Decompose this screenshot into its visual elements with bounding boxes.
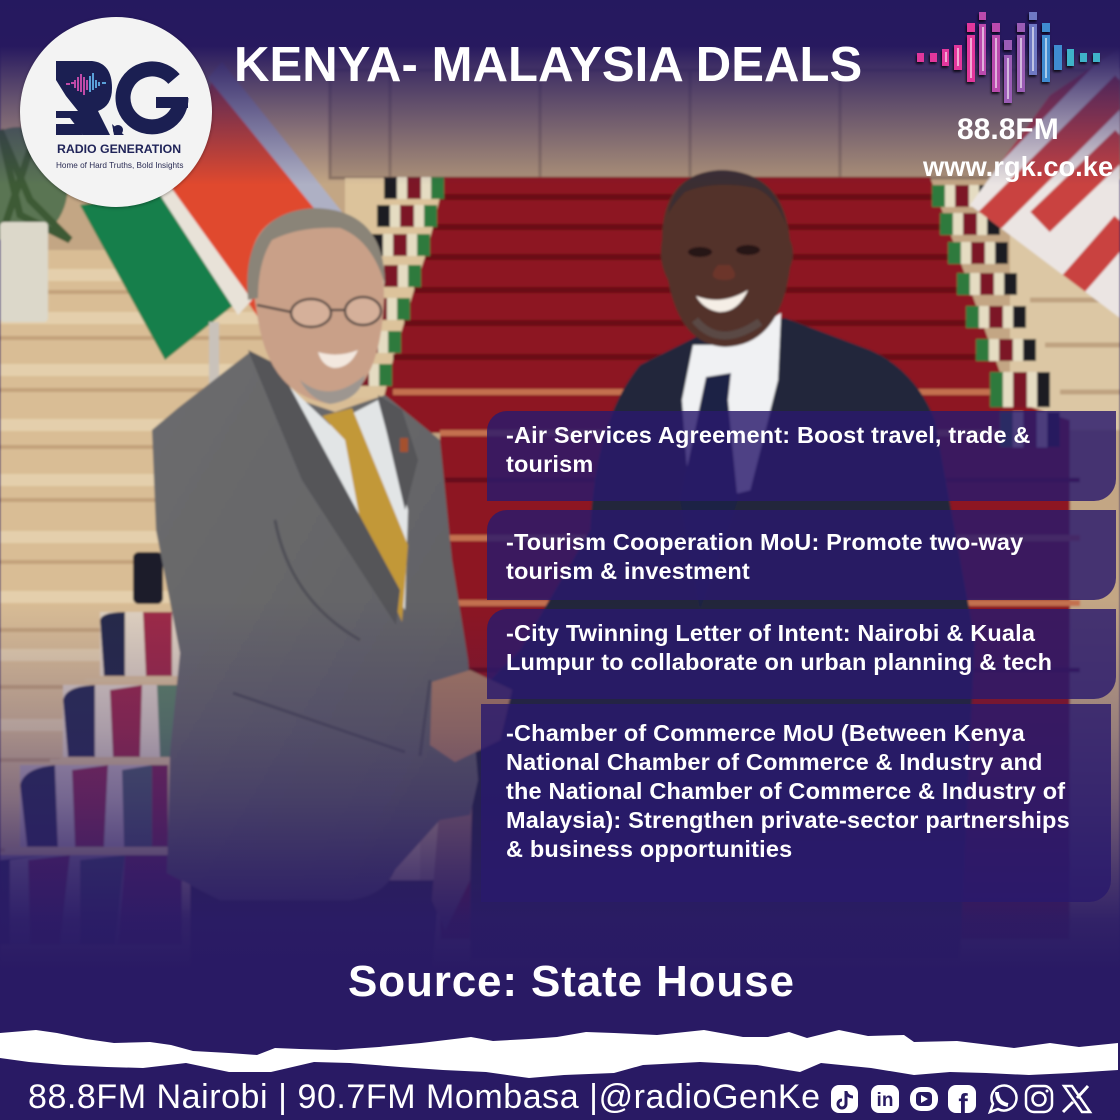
Kenyan flag	[80, 62, 342, 360]
carpet right mosaic border	[932, 185, 1060, 447]
plant and pot	[0, 127, 70, 322]
logo mark	[56, 61, 188, 135]
trousers	[190, 880, 440, 1000]
carpet left mosaic border	[332, 177, 444, 386]
second hand	[432, 800, 472, 930]
mouth	[318, 350, 358, 368]
callout text: -City Twinning Letter of Intent: Nairobi & Kuala	[506, 620, 1035, 646]
callout: tourism	[487, 510, 1116, 600]
callout text: -Chamber of Commerce MoU (Between Kenya	[506, 720, 1025, 746]
left man	[152, 208, 512, 1000]
title: KENYA- MALAYSIA DEALS	[234, 38, 862, 92]
callout text	[506, 422, 1031, 477]
source line: Source: State House	[348, 957, 795, 1006]
icon: tiktok	[831, 1085, 858, 1113]
left stone stairs	[0, 178, 445, 910]
callout text	[506, 529, 1023, 584]
callout text: -Tourism Cooperation MoU: Promote two-way	[506, 529, 1023, 555]
footer stations and handle: 88.8FM Nairobi | 90.7FM Mombasa |@radioGenKe	[28, 1078, 821, 1116]
sleeve seam	[233, 520, 430, 756]
frequency label: 88.8FM	[957, 113, 1059, 146]
logo badge	[20, 17, 212, 207]
callout text: Malaysia): Strengthen private-sector partnerships	[506, 807, 1070, 833]
head	[250, 210, 384, 404]
upper wall with columns	[330, 70, 1120, 178]
callout: air services	[487, 411, 1116, 501]
jacket	[152, 352, 478, 900]
callout text: tourism & investment	[506, 558, 750, 584]
torn white paper strip	[0, 1030, 1118, 1078]
red carpet stairs	[375, 177, 1080, 940]
glasses	[257, 305, 291, 312]
icon: facebook	[948, 1085, 976, 1119]
icon: linkedin	[871, 1085, 899, 1113]
top fade	[0, 0, 1120, 185]
American flag	[970, 58, 1120, 318]
social icons	[831, 1084, 1092, 1118]
logo name: RADIO GENERATION	[57, 142, 181, 156]
icon: instagram	[1026, 1086, 1052, 1112]
shirt	[272, 370, 408, 610]
callout text: the National Chamber of Commerce & Industry of	[506, 778, 1065, 804]
callout text: & business opportunities	[506, 836, 792, 862]
right man	[470, 170, 975, 960]
website label: www.rgk.co.ke	[923, 151, 1113, 182]
tie	[322, 408, 408, 622]
callout text: -Air Services Agreement: Boost travel, trade &	[506, 422, 1031, 448]
callout: chamber of commerce	[481, 704, 1111, 902]
icon: sound wave	[914, 12, 1100, 106]
lapels	[248, 350, 400, 625]
callout text: Lumpur to collaborate on urban planning & tech	[506, 649, 1052, 675]
bottom fade	[0, 600, 1120, 970]
icon: youtube	[910, 1087, 938, 1111]
callout text	[506, 620, 1052, 675]
icon: X	[1063, 1086, 1090, 1112]
callout text	[506, 720, 1070, 862]
callout text: National Chamber of Commerce & Industry and	[506, 749, 1043, 775]
left striped carpet steps	[0, 552, 190, 945]
callout: city twinning	[487, 609, 1116, 699]
logo tagline: Home of Hard Truths, Bold Insights	[56, 161, 183, 170]
handshake	[430, 670, 512, 762]
callout text: tourism	[506, 451, 593, 477]
flag pole	[209, 322, 219, 392]
right stone stairs	[1010, 170, 1120, 430]
icon: linkedin: in	[877, 1090, 893, 1111]
icon: whatsapp	[990, 1086, 1016, 1112]
